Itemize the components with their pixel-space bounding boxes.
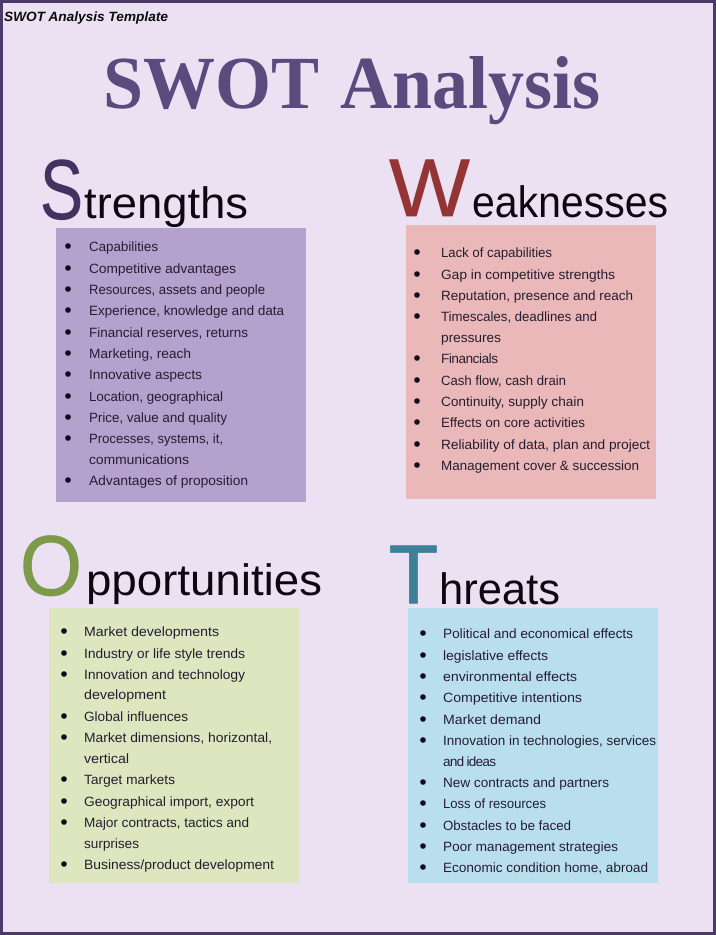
list: opportunities: Market dimensions, horizontal, bbox=[84, 730, 272, 745]
template label: SWOT Analysis Template bbox=[4, 9, 168, 24]
list: strengths: Location, geographical bbox=[89, 389, 223, 404]
list: strengths: Innovative aspects bbox=[89, 367, 202, 382]
list: opportunities: Major contracts, tactics and bbox=[84, 815, 249, 830]
list: opportunities: Business/product development bbox=[84, 857, 274, 872]
heading: Threats: hreats bbox=[439, 565, 560, 614]
panel: threats bbox=[408, 608, 658, 883]
heading: Opportunities: pportunities bbox=[86, 556, 322, 605]
panel: opportunities bbox=[49, 608, 299, 883]
list: threats: Market demand bbox=[443, 712, 541, 727]
bullets: threats bbox=[420, 630, 426, 870]
heading: Threats bbox=[389, 528, 560, 621]
list: weaknesses: pressures bbox=[441, 330, 501, 345]
heading: Strengths: trengths bbox=[84, 179, 248, 228]
heading: Opportunities: O bbox=[20, 519, 82, 614]
list: strengths: Experience, knowledge and data bbox=[89, 303, 284, 318]
heading: Weaknesses: W bbox=[389, 143, 471, 234]
list: strengths: Advantages of proposition bbox=[89, 473, 248, 488]
list: weaknesses: Effects on core activities bbox=[441, 415, 585, 430]
heading: Opportunities bbox=[20, 519, 322, 614]
title bbox=[103, 42, 600, 125]
panel: weaknesses bbox=[406, 225, 656, 499]
list: weaknesses: Gap in competitive strengths bbox=[441, 267, 615, 282]
list: strengths: Capabilities bbox=[89, 239, 158, 254]
list: weaknesses: Continuity, supply chain bbox=[441, 394, 584, 409]
list: threats: Poor management strategies bbox=[443, 839, 618, 854]
list: threats: Loss of resources bbox=[443, 796, 546, 811]
list: opportunities: Innovation and technology bbox=[84, 667, 245, 682]
list: weaknesses: Reliability of data, plan and project bbox=[441, 437, 650, 452]
list: opportunities: development bbox=[84, 687, 166, 702]
list: threats: Innovation in technologies, services bbox=[443, 733, 656, 748]
list: weaknesses: Reputation, presence and reach bbox=[441, 288, 633, 303]
list: opportunities: Global influences bbox=[84, 709, 188, 724]
list: weaknesses: Cash flow, cash drain bbox=[441, 373, 566, 388]
panel: strengths bbox=[56, 228, 306, 502]
list: threats: environmental effects bbox=[443, 669, 577, 684]
bullets: opportunities bbox=[61, 628, 67, 867]
list: opportunities: Target markets bbox=[84, 772, 175, 787]
list: weaknesses: Timescales, deadlines and bbox=[441, 309, 597, 324]
heading: Strengths: S bbox=[40, 143, 83, 238]
list: strengths: Financial reserves, returns bbox=[89, 325, 248, 340]
list: strengths: Price, value and quality bbox=[89, 410, 227, 425]
heading: Weaknesses bbox=[389, 143, 668, 234]
list: weaknesses: Financials bbox=[441, 351, 498, 366]
list: weaknesses: Management cover & succession bbox=[441, 458, 639, 473]
bullets: weaknesses bbox=[414, 249, 420, 468]
list: strengths: communications bbox=[89, 452, 189, 467]
list: opportunities: surprises bbox=[84, 836, 139, 851]
title: SWOT bbox=[103, 42, 319, 125]
list: weaknesses: Lack of capabilities bbox=[441, 245, 552, 260]
list: threats: and ideas bbox=[443, 754, 496, 769]
list: opportunities: Geographical import, export bbox=[84, 794, 254, 809]
list: opportunities: vertical bbox=[84, 751, 129, 766]
list: threats: legislative effects bbox=[443, 648, 548, 663]
list: threats: Economic condition home, abroad bbox=[443, 860, 648, 875]
list: strengths: Marketing, reach bbox=[89, 346, 191, 361]
list: threats bbox=[443, 626, 656, 875]
heading: Weaknesses: eaknesses bbox=[472, 178, 668, 227]
heading: Threats: T bbox=[389, 528, 438, 621]
list: threats: Political and economical effects bbox=[443, 626, 633, 641]
list: opportunities bbox=[84, 624, 274, 872]
list: strengths: Resources, assets and people bbox=[89, 282, 265, 297]
list: threats: Obstacles to be faced bbox=[443, 818, 571, 833]
bullets: strengths bbox=[65, 243, 71, 483]
list: strengths: Processes, systems, it, bbox=[89, 431, 223, 446]
title: Analysis bbox=[340, 42, 600, 125]
list: strengths bbox=[89, 239, 284, 488]
list: threats: Competitive intentions bbox=[443, 690, 582, 705]
list: opportunities: Market developments bbox=[84, 624, 219, 639]
heading: Strengths bbox=[40, 143, 248, 238]
list: weaknesses bbox=[441, 245, 650, 473]
list: strengths: Competitive advantages bbox=[89, 261, 236, 276]
list: threats: New contracts and partners bbox=[443, 775, 609, 790]
list: opportunities: Industry or life style trends bbox=[84, 646, 245, 661]
